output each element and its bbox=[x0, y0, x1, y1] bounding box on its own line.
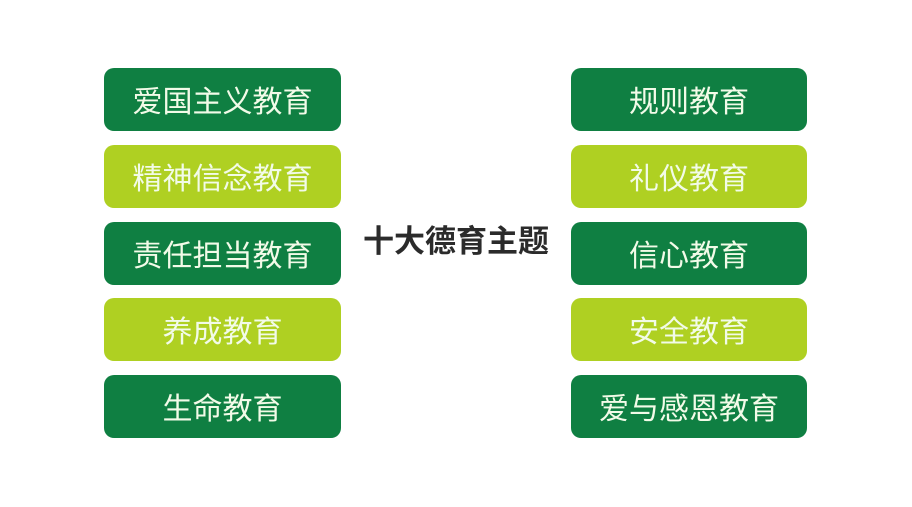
button: patriotism education bbox=[104, 68, 341, 131]
button: spirit and belief education bbox=[104, 145, 341, 208]
title: 十大德育主题 bbox=[363, 224, 549, 259]
button: patriotism education: 爱国主义教育 bbox=[132, 86, 312, 119]
button: responsibility education bbox=[104, 222, 341, 285]
button: etiquette education: 礼仪教育 bbox=[629, 163, 749, 196]
button: life education: 生命教育 bbox=[162, 393, 282, 426]
button: rules education bbox=[571, 68, 807, 131]
button: confidence education bbox=[571, 222, 807, 285]
button: rules education: 规则教育 bbox=[629, 86, 749, 119]
button: habit formation education: 养成教育 bbox=[162, 316, 282, 349]
button: love and gratitude education bbox=[571, 375, 807, 438]
button: spirit and belief education: 精神信念教育 bbox=[132, 163, 312, 196]
button: habit formation education bbox=[104, 298, 341, 361]
button: safety education bbox=[571, 298, 807, 361]
button: life education bbox=[104, 375, 341, 438]
button: safety education: 安全教育 bbox=[629, 316, 749, 349]
button: responsibility education: 责任担当教育 bbox=[132, 240, 312, 273]
button: etiquette education bbox=[571, 145, 807, 208]
button: confidence education: 信心教育 bbox=[629, 240, 749, 273]
button: love and gratitude education: 爱与感恩教育 bbox=[599, 393, 779, 426]
